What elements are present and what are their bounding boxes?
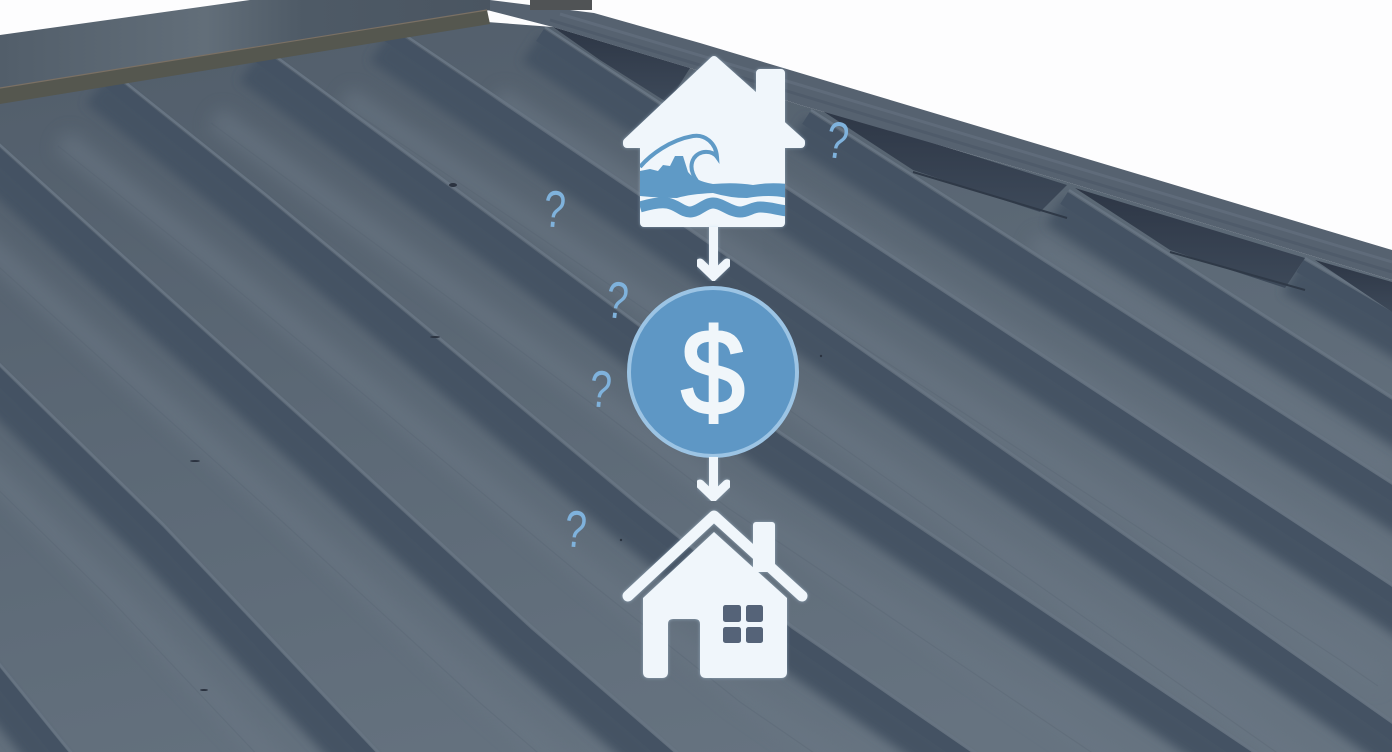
surface spots <box>190 183 822 691</box>
lighter pan stripes <box>0 96 820 414</box>
question marks <box>541 109 852 559</box>
dark gaps beneath right ridge cap <box>553 27 1392 312</box>
question mark 4: ? <box>587 359 614 419</box>
left ridge cap <box>0 0 490 88</box>
roof chevron <box>628 516 802 596</box>
window <box>723 605 763 643</box>
question mark 5: ? <box>562 499 589 559</box>
wave body <box>640 156 787 198</box>
arrow: cost to home <box>700 457 727 497</box>
icon: home <box>628 516 802 678</box>
icon: dollar coin <box>629 288 797 456</box>
flood wave artwork <box>640 136 787 212</box>
brown flashing strip <box>0 10 490 104</box>
question mark 3: ? <box>603 270 632 331</box>
stump behind ridge junction <box>530 0 592 10</box>
right ridge cap <box>487 0 1392 280</box>
dollar sign: $ <box>681 305 745 441</box>
wave band <box>640 203 787 212</box>
icon: house with flood wave <box>627 60 801 223</box>
question mark 2: ? <box>541 179 568 239</box>
wave crest <box>640 136 717 181</box>
eave flashing lines <box>913 172 1305 290</box>
chimney <box>753 522 775 572</box>
house body <box>643 532 787 678</box>
arrow: house to cost <box>700 227 727 276</box>
question mark 1: ? <box>823 109 852 171</box>
